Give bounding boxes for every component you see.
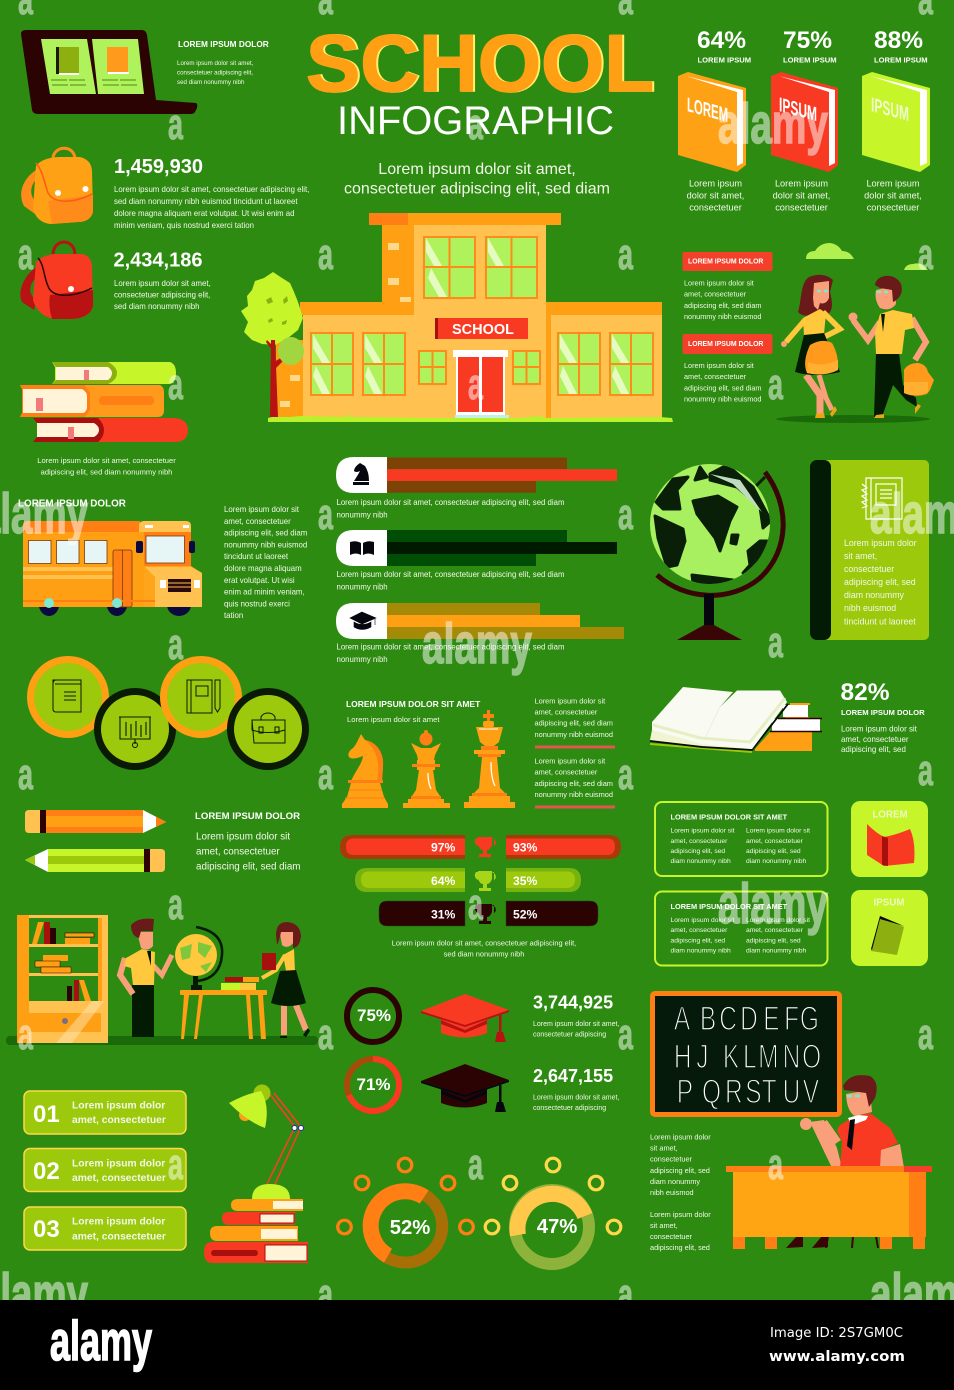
laptop heading and text: Lorem ipsum dolor sit amet,: [177, 60, 254, 67]
panel: red tag texts: [682, 252, 772, 403]
stat: 2,647,155: Lorem ipsum dolor sit amet,: [533, 1094, 619, 1102]
bus text: Lorem ipsum dolor sit: [224, 505, 300, 514]
icon: orange pencil: [25, 810, 166, 833]
chess text columns: nonummy nibh euismod: [534, 730, 613, 739]
watermark overlay: a: [918, 1010, 933, 1059]
ring chart 75%: [347, 990, 399, 1042]
watermark overlay: a: [768, 360, 783, 409]
numbered list item 01: amet, consectetuer: [72, 1115, 166, 1126]
percent bars: dark row: 31%: [431, 908, 456, 922]
panel: notebook card: [810, 460, 929, 640]
watermark overlay: alamy: [718, 872, 828, 936]
woman with book: [262, 922, 310, 1038]
bus text: dolore magna aliquam: [224, 564, 302, 573]
watermark overlay: a: [618, 1270, 633, 1319]
footer logo: alamy: [50, 1309, 152, 1372]
panel: notebook card: tincidunt ut laoreet: [844, 616, 916, 626]
stat: 82%: Lorem ipsum dolor sit: [841, 724, 918, 734]
sign: SCHOOL: [435, 318, 528, 339]
stat: 88% lime book: 88%: [874, 27, 923, 54]
tree: [241, 272, 304, 417]
stat: 64% orange book: Lorem ipsum: [689, 179, 742, 189]
panel: outlined text box two: diam nonummy nibh: [746, 948, 806, 955]
footer bar: [0, 1300, 954, 1390]
stat: 64% orange book: 64%: [697, 27, 746, 54]
stat: 88% lime book: dolor sit amet,: [864, 191, 922, 201]
teacher text blocks: Lorem ipsum dolor: [650, 1210, 711, 1219]
panel: lime card LOREM: LOREM: [872, 810, 908, 820]
stat: 1,459,930: minim veniam, quis nostrud exerci tation: [114, 221, 254, 230]
image id: Image ID: 2S7GM0C: [770, 1325, 903, 1341]
watermark overlay: a: [318, 230, 333, 279]
title: SCHOOL: [308, 19, 656, 109]
chess text columns: nonummy nibh euismod: [534, 790, 613, 799]
subtitle: [344, 161, 610, 198]
watermark overlay: a: [468, 880, 483, 929]
icon circles row: [27, 656, 309, 770]
bus text: adipiscing elit, sed diam: [224, 529, 308, 538]
books caption: Lorem ipsum dolor sit amet, consectetuer: [37, 456, 176, 465]
teacher at desk: [726, 1075, 932, 1249]
chess queen: [403, 730, 450, 808]
percent bars: green row: 35%: [513, 874, 538, 888]
sign: SCHOOL: SCHOOL: [452, 322, 514, 338]
panel: outlined text box one: LOREM IPSUM DOLOR SIT AMET: [670, 812, 788, 822]
watermark overlay: a: [318, 1010, 333, 1059]
watermark overlay: a: [168, 880, 183, 929]
stat group: three percentage books: [678, 27, 930, 213]
stat: 75% red book: IPSUM: [779, 93, 817, 126]
icon: book circle: [27, 656, 109, 738]
donut chart 47%: 47%: [537, 1216, 577, 1238]
icon: dark trophy: [475, 904, 496, 924]
stat: 88% lime book: Lorem ipsum: [866, 179, 920, 189]
stat: 2,434,186: consectetuer adipiscing elit,: [114, 290, 210, 300]
panel: notebook card: consectetuer: [844, 564, 894, 574]
chess text columns: Lorem ipsum dolor sit: [534, 756, 605, 766]
panel: outlined text box two: amet, consectetuer: [670, 927, 728, 934]
icon: open book with stack: [650, 687, 822, 752]
stat: 75% red book: dolor sit amet,: [773, 191, 830, 201]
stat: 64% orange book: LOREM IPSUM: [698, 56, 751, 65]
panel: red tag texts: Lorem ipsum dolor sit: [684, 361, 754, 370]
stat: 3,744,925: consectetuer adipiscing: [533, 1032, 606, 1039]
teacher text blocks: consectetuer: [650, 1232, 693, 1241]
stat: 3,744,925: Lorem ipsum dolor sit amet,: [533, 1021, 619, 1028]
numbered list item 03: amet, consectetuer: [72, 1232, 166, 1242]
chess text columns: adipiscing elit, sed diam: [534, 779, 613, 788]
panel: outlined text box one: amet, consectetuer: [746, 838, 804, 845]
panel: outlined text box one: Lorem ipsum dolor sit: [746, 828, 810, 835]
panel: outlined text box one: diam nonummy nibh: [746, 858, 806, 865]
teacher text blocks: sit amet,: [650, 1144, 678, 1153]
teacher text blocks: adipiscing elit, sed: [650, 1243, 710, 1252]
stat: 64% orange book: dolor sit amet,: [687, 191, 744, 201]
bar chart: graduation: nonummy nibh: [336, 655, 388, 664]
panel: notebook card: nibh euismod: [844, 603, 896, 613]
stat: 2,434,186: sed diam nonummy nibh: [114, 302, 199, 311]
chess knight: [342, 734, 388, 808]
pencil text block: adipiscing elit, sed diam: [196, 862, 301, 872]
blackboard: [650, 991, 842, 1117]
panel: red tag texts: amet, consectetuer: [684, 290, 747, 298]
percent bars: green row: [355, 868, 581, 892]
watermark overlay: a: [468, 1140, 483, 1189]
panel: outlined text box two: Lorem ipsum dolor sit: [746, 917, 810, 924]
stat: 2,647,155: consectetuer adipiscing: [533, 1105, 606, 1112]
numbered list item 01: [24, 1091, 186, 1134]
stat: 2,434,186: Lorem ipsum dolor sit amet,: [114, 279, 211, 288]
small globe on table: [175, 927, 222, 990]
percent bars: dark row: [379, 901, 598, 926]
site url: www.alamy.com: [769, 1349, 905, 1365]
stat: 1,459,930: dolore magna aliquam erat volutpat. Ut wisi enim ad: [114, 209, 294, 218]
panel: red tag texts: LOREM IPSUM DOLOR: [688, 259, 763, 266]
stat: 82%: [840, 679, 925, 754]
donut chart 47%: [485, 1158, 621, 1264]
panel: outlined text box two: amet, consectetuer: [746, 927, 804, 934]
icon: notebook and pencil circle: [160, 656, 242, 738]
percent bars: red row: 97%: [431, 840, 456, 854]
watermark overlay: a: [618, 230, 633, 279]
ring chart 71%: 71%: [356, 1075, 391, 1094]
panel: outlined text box one: amet, consectetuer: [670, 838, 728, 845]
panel: outlined text box two: adipiscing elit, sed: [670, 937, 725, 944]
laptop heading and text: LOREM IPSUM DOLOR: [178, 39, 269, 49]
watermark overlay: a: [618, 490, 633, 539]
blackboard: HJKLMNO: [674, 1038, 821, 1076]
panel: lime card LOREM: [851, 801, 928, 877]
watermark overlay: a: [918, 746, 933, 795]
icon: open book: [350, 541, 374, 555]
stat: 1,459,930: [114, 156, 309, 230]
stat: 64% orange book: LOREM: [687, 94, 728, 127]
watermark overlay: a: [18, 1010, 33, 1059]
icon: red graduation cap: [421, 994, 509, 1042]
title: SCHOOL: [306, 19, 654, 109]
stat: 3,744,925: 3,744,925: [533, 992, 613, 1012]
panel: red tag texts: Lorem ipsum dolor sit: [684, 278, 754, 288]
stat: 1,459,930: Lorem ipsum dolor sit amet, consectetuer adipiscing elit,: [114, 185, 309, 194]
percent bars caption: sed diam nonummy nibh: [444, 950, 524, 959]
watermark overlay: a: [768, 618, 783, 667]
percent bars: dark row: 52%: [513, 908, 538, 922]
percent bars: red row: 93%: [513, 840, 538, 854]
icon: red backpack: [20, 242, 93, 319]
watermark overlay: a: [18, 230, 33, 279]
subtitle: consectetuer adipiscing elit, sed diam: [344, 180, 610, 198]
stat: 2,647,155: 2,647,155: [533, 1066, 613, 1086]
bar chart: open book: nonummy nibh: [336, 582, 388, 592]
panel: lime card IPSUM: [851, 890, 928, 966]
icon: chess knight: [353, 463, 369, 485]
icon: chart presentation circle: [94, 688, 176, 770]
chess heading: LOREM IPSUM DOLOR SIT AMET: [346, 699, 481, 709]
panel: red tag texts: adipiscing elit, sed diam: [684, 383, 761, 392]
school building: [268, 213, 673, 422]
watermark overlay: a: [618, 750, 633, 799]
watermark overlay: a: [918, 230, 933, 279]
donut chart 52%: 52%: [390, 1217, 430, 1239]
panel: outlined text box two: [655, 892, 828, 966]
watermark overlay: a: [168, 100, 183, 149]
panel: outlined text box one: [655, 802, 828, 876]
panel: outlined text box one: adipiscing elit, sed: [746, 848, 801, 855]
bookshelf: [17, 915, 108, 1043]
watermark overlay: a: [468, 360, 483, 409]
stat: 75% red book: 75%: [783, 27, 832, 54]
panel: outlined text box two: Lorem ipsum dolor sit: [670, 917, 735, 924]
stat: 1,459,930: sed diam nonummy nibh euismod tincidunt ut laoreet: [114, 197, 298, 206]
watermark overlay: a: [468, 100, 483, 149]
chess king: [464, 710, 515, 808]
percent bars caption: Lorem ipsum dolor sit amet, consectetuer adipiscing elit,: [392, 938, 576, 948]
laptop heading and text: consectetuer adipiscing elit,: [177, 70, 253, 77]
numbered list item 02: Lorem ipsum dolor: [72, 1158, 165, 1170]
stat: 82%: LOREM IPSUM DOLOR: [841, 708, 925, 717]
stat: 75% red book: consectetuer: [775, 203, 828, 213]
stat: 2,647,155: [533, 1066, 619, 1112]
panel: notebook card: sit amet,: [844, 551, 877, 561]
chess heading: [346, 699, 481, 724]
chess text columns: Lorem ipsum dolor sit: [534, 696, 605, 705]
numbered list item 02: amet, consectetuer: [72, 1173, 166, 1184]
watermark overlay: a: [318, 750, 333, 799]
numbered list item 01: 01: [33, 1101, 60, 1128]
watermark overlay: a: [618, 1010, 633, 1059]
panel: outlined text box two: LOREM IPSUM DOLOR SIT AMET: [670, 902, 788, 911]
icon: small green book: [871, 916, 904, 955]
stat: 75% red book: Lorem ipsum: [775, 179, 828, 189]
bar chart: chess: [336, 457, 617, 519]
icon: lime pencil: [25, 849, 165, 872]
bar chart: graduation: Lorem ipsum dolor sit amet, consectetuer adipiscing elit, sed diam: [336, 642, 564, 652]
bar chart: chess: Lorem ipsum dolor sit amet, consectetuer adipiscing elit, sed diam: [336, 498, 564, 507]
bus text: tation: [224, 611, 243, 620]
students walking: [776, 275, 934, 423]
numbered list item 03: [24, 1207, 186, 1250]
donut chart 52%: [338, 1158, 473, 1262]
panel: outlined text box one: diam nonummy nibh: [670, 858, 731, 865]
bus text: enim ad minim veniam,: [224, 588, 305, 597]
panel: notebook card: diam nonummy: [844, 590, 905, 600]
bar chart: open book: [336, 530, 617, 592]
man at globe: [120, 919, 172, 1037]
watermark overlay: a: [168, 1140, 183, 1189]
blackboard: PQRSTUV: [677, 1073, 819, 1111]
watermark overlay: a: [768, 1140, 783, 1189]
stat: 82%: amet, consectetuer: [841, 735, 909, 744]
bar chart: graduation: [336, 603, 624, 664]
icon: black graduation cap: [421, 1064, 509, 1112]
bar chart: chess: nonummy nibh: [336, 510, 388, 519]
bus heading: LOREM IPSUM DOLOR: [18, 498, 126, 510]
percent bars: green row: 64%: [431, 874, 456, 888]
icon: desk lamp on books: [204, 1084, 308, 1263]
icon: red trophy: [475, 837, 496, 857]
teacher text blocks: sit amet,: [650, 1221, 678, 1230]
panel: outlined text box one: adipiscing elit, sed: [670, 848, 725, 855]
teacher text blocks: nibh euismod: [650, 1188, 694, 1197]
school bus: [23, 521, 202, 616]
icon: briefcase circle: [227, 688, 309, 770]
pencil text block: amet, consectetuer: [196, 846, 280, 858]
percent bars caption: [392, 938, 576, 959]
panel: outlined text box one: Lorem ipsum dolor sit: [670, 828, 735, 835]
laptop illustration: [21, 30, 197, 114]
stat: 75% red book: LOREM IPSUM: [783, 56, 837, 65]
numbered list item 03: Lorem ipsum dolor: [72, 1216, 165, 1228]
chess text columns: [534, 696, 615, 808]
teacher text blocks: consectetuer: [650, 1155, 693, 1164]
stat: 2,434,186: [114, 250, 211, 311]
clouds: [806, 243, 928, 270]
stat: 2,434,186: 2,434,186: [114, 250, 202, 272]
panel: red tag texts: nonummy nibh euismod: [684, 394, 761, 403]
icon: globe: [650, 464, 783, 640]
stat: 64% orange book: [678, 27, 751, 213]
pencil text block: [195, 811, 301, 872]
books caption: adipiscing elit, sed diam nonummy nibh: [41, 468, 172, 476]
teacher text blocks: adipiscing elit, sed: [650, 1166, 710, 1175]
stat: 3,744,925: [533, 992, 619, 1039]
numbered list item 02: [24, 1148, 186, 1192]
teacher text blocks: [650, 1133, 711, 1252]
percent bars: red row: [340, 835, 621, 859]
bus text: [224, 505, 308, 620]
watermark overlay: alamy: [718, 92, 828, 156]
bus text: amet, consectetuer: [224, 517, 291, 526]
icon: notebook outline: [862, 478, 902, 519]
watermark overlay: a: [318, 490, 333, 539]
chess heading: Lorem ipsum dolor sit amet: [347, 715, 440, 724]
laptop heading and text: [177, 39, 269, 86]
watermark overlay: alamy: [422, 612, 532, 676]
teacher text blocks: diam nonummy: [650, 1177, 700, 1186]
panel: notebook card: Lorem ipsum dolor: [844, 538, 917, 548]
panel: red tag texts: adipiscing elit, sed diam: [684, 301, 761, 310]
stat: 82%: adipiscing elit, sed: [841, 745, 906, 754]
watermark overlay: a: [18, 750, 33, 799]
pencil text block: LOREM IPSUM DOLOR: [195, 811, 300, 822]
stat: 1,459,930: 1,459,930: [114, 156, 203, 178]
panel: outlined text box two: adipiscing elit, sed: [746, 937, 801, 944]
chess text columns: amet, consectetuer: [534, 708, 598, 716]
panel: outlined text box two: diam nonummy nibh: [670, 948, 731, 955]
panel: lime card IPSUM: IPSUM: [873, 898, 905, 908]
icon: graduation cap: [350, 612, 376, 630]
panel: red tag texts: amet, consectetuer: [684, 372, 747, 381]
title: INFOGRAPHIC: [337, 99, 614, 143]
table with books: [180, 977, 267, 1039]
icon: orange backpack: [21, 148, 93, 224]
blackboard: ABCDEFG: [674, 1000, 819, 1038]
pencil text block: Lorem ipsum dolor sit: [196, 832, 290, 842]
stat: 88% lime book: IPSUM: [871, 93, 909, 126]
watermark overlay: a: [168, 360, 183, 409]
panel: notebook card: adipiscing elit, sed: [844, 577, 916, 587]
icon: red open book: [867, 824, 914, 866]
chess text columns: amet, consectetuer: [534, 768, 598, 777]
stat: 64% orange book: consectetuer: [689, 203, 742, 213]
bar chart: open book: Lorem ipsum dolor sit amet, consectetuer adipiscing elit, sed diam: [336, 570, 564, 579]
ring chart 75%: 75%: [357, 1006, 391, 1025]
icon: stacked books: [20, 362, 188, 442]
panel: red tag texts: nonummy nibh euismod: [684, 312, 761, 321]
numbered list item 02: 02: [33, 1158, 60, 1185]
chess text columns: adipiscing elit, sed diam: [534, 719, 613, 728]
stat: 82%: 82%: [840, 679, 890, 706]
stat: 88% lime book: [862, 27, 930, 213]
numbered list item 03: 03: [33, 1216, 60, 1243]
bus text: nonummy nibh euismod: [224, 540, 307, 549]
bus text: erat volutpat. Ut wisi: [224, 576, 295, 585]
numbered list item 01: Lorem ipsum dolor: [72, 1100, 165, 1112]
laptop heading and text: sed diam nonummy nibh: [177, 79, 245, 86]
icon: green trophy: [475, 871, 496, 891]
stat: 75% red book: [771, 27, 838, 213]
books caption: [37, 456, 176, 476]
stat: 88% lime book: consectetuer: [867, 203, 919, 213]
illustration: bookshelf and people: [6, 915, 318, 1045]
teacher text blocks: Lorem ipsum dolor: [650, 1133, 711, 1142]
stat: 88% lime book: LOREM IPSUM: [874, 56, 928, 65]
ring chart 71%: [347, 1059, 399, 1111]
subtitle: Lorem ipsum dolor sit amet,: [378, 161, 576, 178]
watermark overlay: a: [318, 1270, 333, 1319]
bus text: quis nostrud exerci: [224, 599, 290, 608]
bus text: tincidunt ut laoreet: [224, 552, 289, 561]
panel: red tag texts: LOREM IPSUM DOLOR: [688, 341, 763, 348]
watermark overlay: a: [168, 620, 183, 669]
